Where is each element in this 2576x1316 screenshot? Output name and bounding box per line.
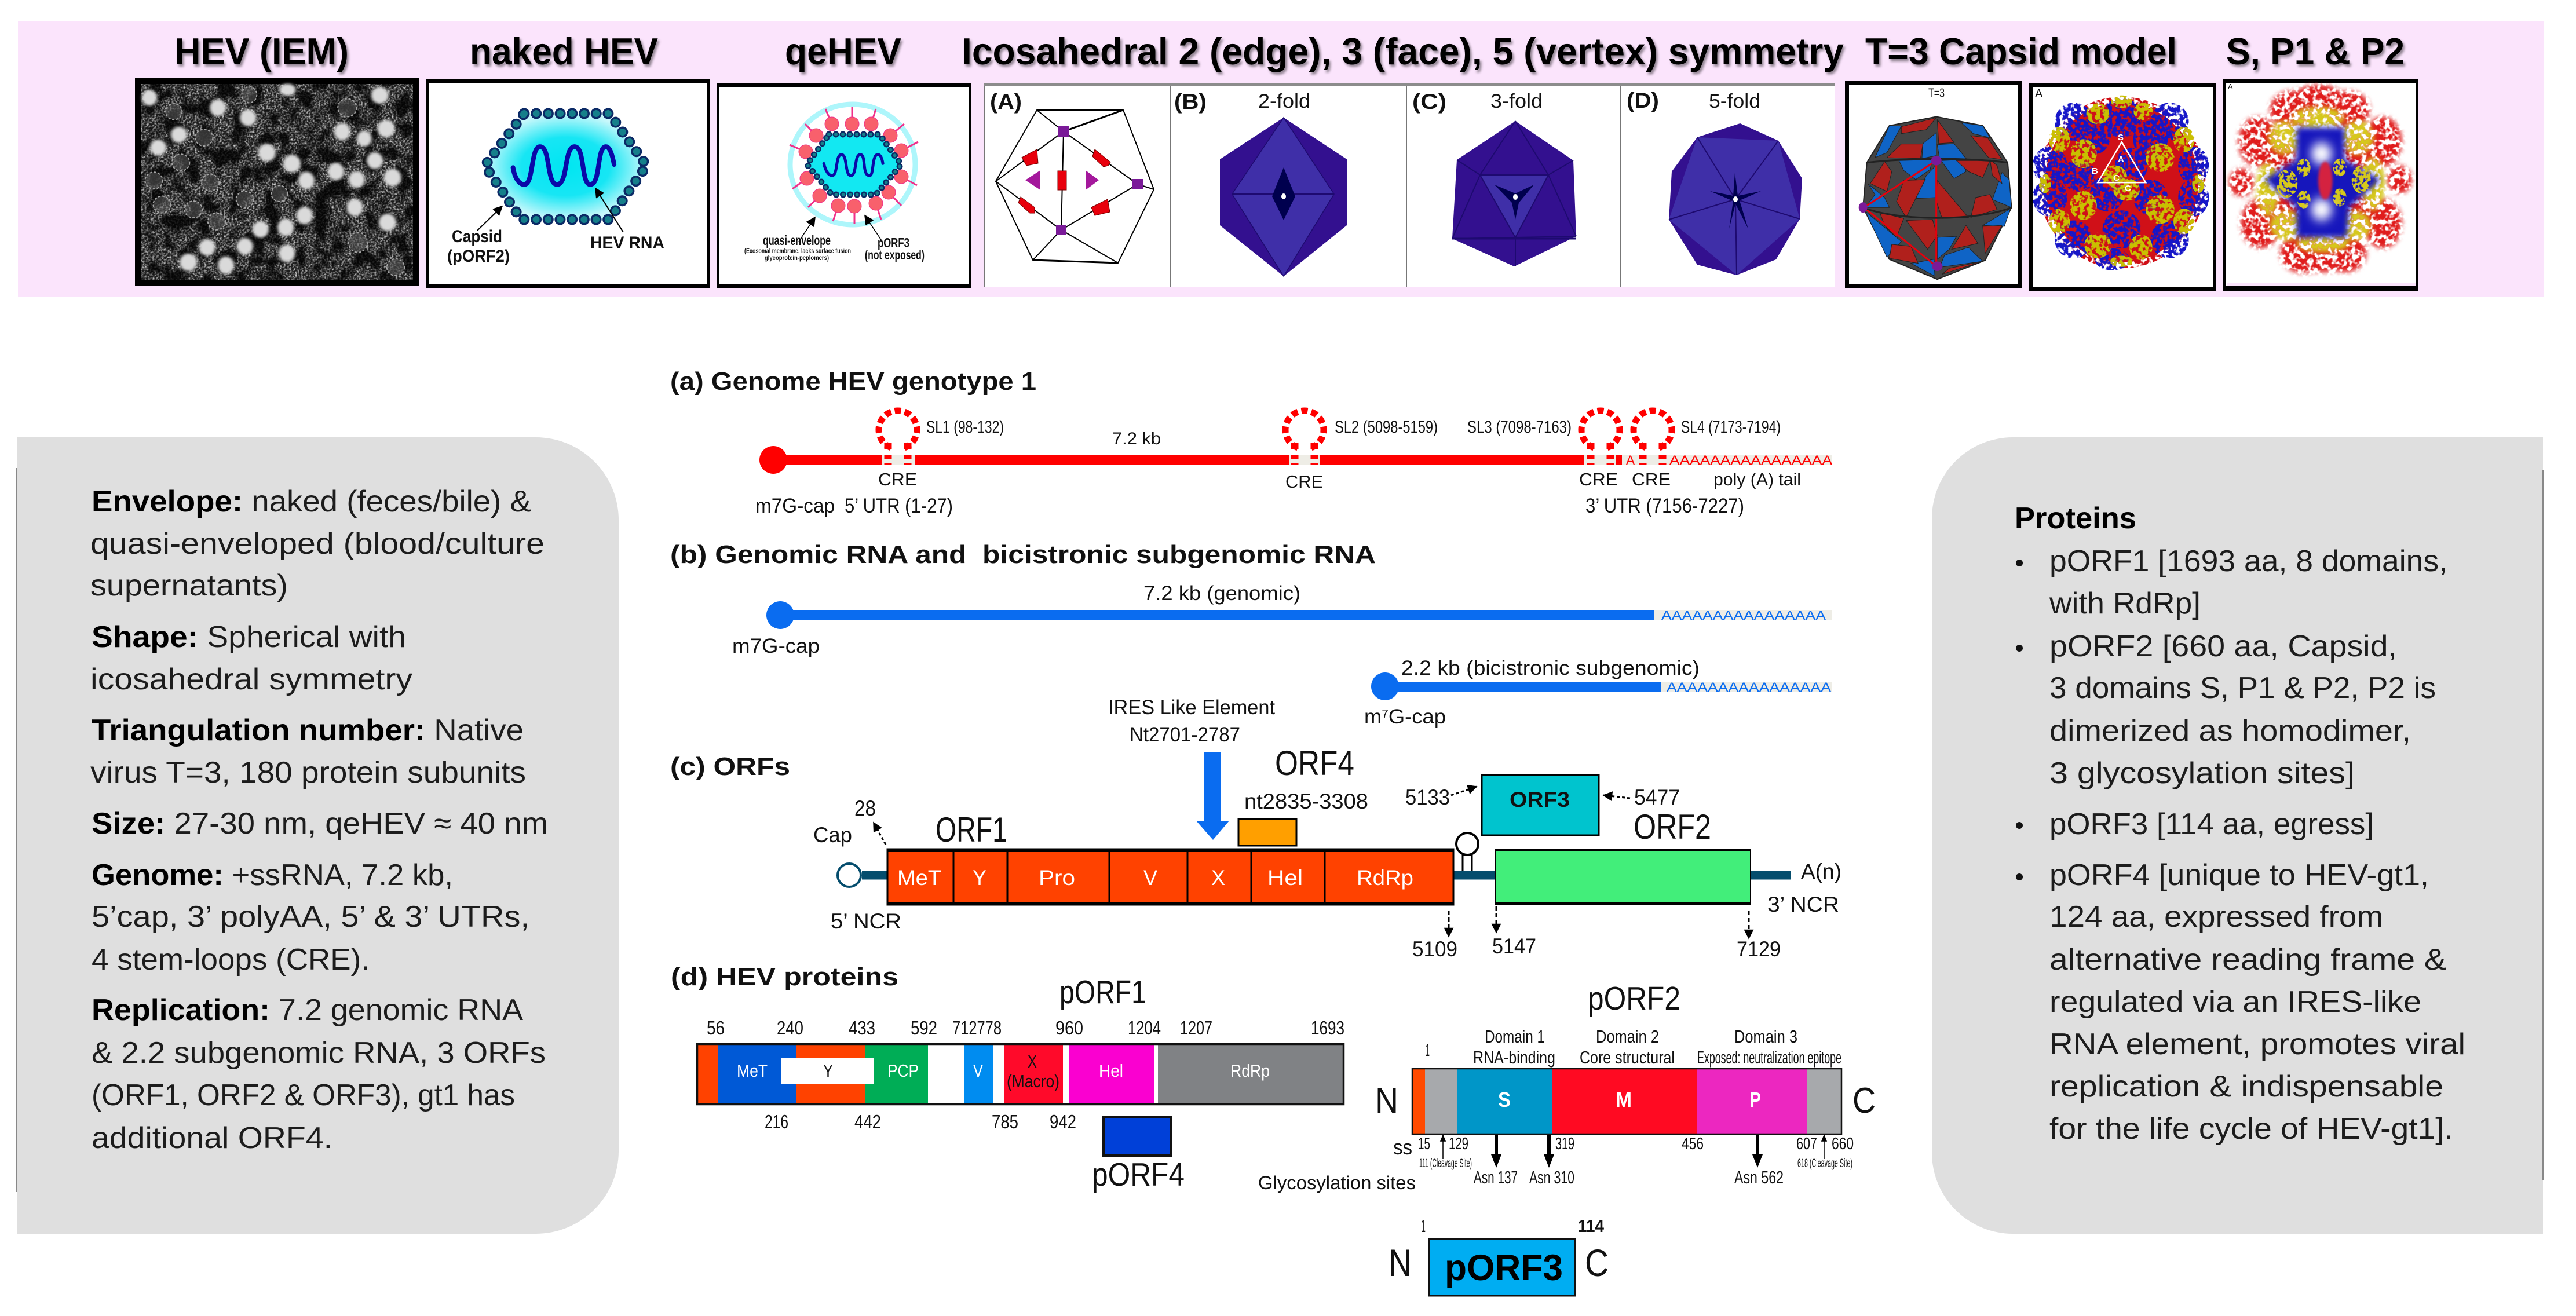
pORF2 domain labels: 1 — [1426, 1040, 1430, 1060]
yellow P1 domain — [2256, 107, 2385, 253]
label: quasi-envelope: quasi-envelope — [763, 233, 831, 248]
label 114 of pORF3: 114 — [1578, 1216, 1605, 1236]
text: replication: replication & indispensable — [2049, 1070, 2443, 1103]
label 5133: 5133 — [1405, 785, 1450, 809]
cleavage arrow 618 — [1822, 1135, 1826, 1159]
label IRES like element: IRES Like Element — [1108, 696, 1275, 719]
pORF2 position numbers: 15 — [1418, 1135, 1430, 1153]
title: icosahedral symmetry: Icosahedral 2 (edge), 3 (face), 5 (vertex) symmetry — [962, 30, 1844, 72]
pORF1 domain bar: PCP — [887, 1061, 919, 1081]
label 5' UTR: 5’ UTR (1-27) — [845, 495, 953, 517]
label 3' NCR: 3’ NCR — [1767, 893, 1839, 916]
envelope ring — [790, 104, 915, 225]
pORF1 bottom numbers: 785 — [992, 1111, 1018, 1132]
pORF1 domain bar — [696, 1043, 1344, 1105]
particles: bright — [142, 84, 401, 274]
label ss: ss — [1393, 1135, 1412, 1159]
glycosylation labels: Asn 137 — [1474, 1167, 1518, 1187]
pORF2 position numbers: 319 — [1555, 1135, 1574, 1153]
red genome line — [759, 446, 1832, 474]
label Cap: Cap — [813, 823, 852, 847]
subgenomic RNA bar: AAAAAAAAAAAAAAAA — [1667, 680, 1831, 694]
text: stem loops: 4 stem-loops (CRE). — [92, 943, 370, 977]
label ORF2: ORF2 — [1634, 807, 1711, 846]
coloured capsid sphere — [2033, 96, 2209, 270]
label 3' UTR: 3’ UTR (7156-7227) — [1585, 495, 1744, 517]
arrow: IRES — [1196, 752, 1229, 840]
poly A letter: A — [1626, 453, 1635, 467]
pORF1 domain bar: X — [1028, 1051, 1037, 1072]
text: cap and UTRs: 5’cap, 3’ polyAA, 5’ & 3’ UTRs, — [92, 900, 529, 934]
arrow: capsid — [477, 206, 502, 231]
text: ORF4: additional ORF4. — [92, 1121, 332, 1155]
bullets — [2016, 560, 2023, 880]
cleavage arrow 111 — [1441, 1135, 1445, 1159]
domain structure — [2229, 85, 2412, 273]
pORF2 domain labels: Domain 2 — [1596, 1026, 1659, 1047]
pORF4 box — [1104, 1117, 1171, 1156]
arrow: pORF3 — [865, 215, 882, 242]
pORF2 domain labels: Exposed: neutralization epitope — [1697, 1047, 1841, 1068]
panel A: wireframe — [990, 90, 1154, 263]
pORF1 bottom numbers: 942 — [1050, 1111, 1076, 1132]
label pORF1: pORF1 — [1059, 974, 1146, 1011]
panel: icosahedral symmetry — [984, 83, 1835, 287]
panel: naked HEV diagram — [426, 79, 710, 288]
label: A: A — [2228, 82, 2233, 91]
pORF2 domain labels: Domain 1 — [1485, 1026, 1545, 1047]
pORF1 bottom numbers: 442 — [854, 1111, 881, 1132]
section d: HEV proteins: 111 (Cleavage Site) — [1419, 1157, 1472, 1170]
panel: T=3 capsid model — [1845, 81, 2022, 288]
label m7G cap: m7G-cap — [755, 495, 835, 517]
text: envelope: Envelope: naked (feces/bile) & — [92, 485, 531, 518]
spikes — [790, 107, 918, 224]
pORF2 position numbers: 129 — [1449, 1135, 1468, 1153]
text: life cycle: for the life cycle of HEV-gt1]. — [2049, 1112, 2453, 1146]
ORF1 bar with domains: RdRp — [1357, 866, 1413, 890]
label N of pORF3: N — [1389, 1241, 1412, 1284]
label nt2835-3308: nt2835-3308 — [1244, 789, 1368, 813]
heading a: (a) Genome HEV genotype 1 — [670, 367, 1036, 396]
title: S, P1 & P2: S, P1 & P2 — [2226, 30, 2405, 72]
ORF1 bar with domains: MeT — [897, 866, 941, 890]
pORF2 domain bar: M — [1616, 1088, 1632, 1112]
label: HEV RNA: HEV RNA — [590, 233, 664, 253]
subgenomic RNA bar — [1371, 672, 1832, 700]
text: pORF3: pORF3 [114 aa, egress] — [2049, 807, 2374, 841]
panel: capsid atomic model — [2029, 83, 2216, 291]
domain letters on capsid: C — [2113, 173, 2120, 183]
capsid hexagon with beads — [485, 114, 646, 220]
pORF1 domain bar: Hel — [1099, 1061, 1123, 1081]
text: T=3: virus T=3, 180 protein subunits — [90, 756, 526, 789]
label SL4: SL4 (7173-7194) — [1681, 418, 1781, 437]
domain letters on capsid: S — [2118, 133, 2124, 142]
label N of pORF2: N — [1375, 1081, 1398, 1121]
domain letters on capsid — [2092, 133, 2131, 193]
pORF3 box — [1429, 1239, 1575, 1296]
text: RNA element: RNA element, promotes viral — [2049, 1028, 2465, 1061]
particles: ring shaped — [145, 87, 404, 276]
label: exosomal membrane: (Exosomal membrane, lacks surface fusion — [744, 247, 851, 255]
text: dimerized: dimerized as homodimer, — [2049, 714, 2411, 748]
label CRE 3: CRE — [1579, 469, 1618, 489]
blue S domain — [2264, 127, 2380, 237]
label C of pORF2: C — [1852, 1081, 1876, 1121]
ORF3 box: ORF3 — [1510, 788, 1570, 811]
glycosylation labels: Asn 310 — [1529, 1167, 1574, 1187]
panel: virus properties — [17, 437, 619, 1234]
text: pORF1: pORF1 [1693 aa, 8 domains, — [2049, 544, 2447, 578]
pORF2 position numbers: 607 — [1796, 1135, 1817, 1153]
pORF2 position numbers: 456 — [1682, 1135, 1704, 1153]
panel D: 5-fold: 5-fold — [1709, 90, 1760, 112]
section d: HEV proteins — [671, 963, 1876, 1296]
section d: HEV proteins: 1 — [1421, 1216, 1426, 1236]
label poly A tail: poly (A) tail — [1713, 469, 1801, 489]
section c: open reading frames — [670, 696, 1841, 961]
stem loop 4 — [1634, 411, 1672, 465]
text: IRES: regulated via an IRES-like — [2049, 985, 2421, 1019]
panel D: 5-fold: (D) — [1627, 89, 1659, 112]
pORF1 domain bar: V — [973, 1061, 983, 1081]
T=3 polyhedron — [1859, 116, 2012, 279]
arrow cap — [874, 822, 886, 845]
label Nt2701-2787: Nt2701-2787 — [1130, 723, 1240, 746]
arrow 5109 — [1448, 911, 1449, 937]
label ORF4: ORF4 — [1275, 744, 1354, 783]
banner background — [18, 21, 2544, 297]
pORF2 domain labels: Domain 3 — [1734, 1026, 1797, 1047]
arrow: envelope — [799, 217, 815, 242]
ORF2 bar — [1495, 849, 1751, 905]
pORF1 bottom numbers: 216 — [765, 1111, 788, 1132]
text: replication: Replication: 7.2 genomic RNA — [92, 993, 523, 1027]
ORF1 bar with domains — [887, 849, 1453, 905]
ORF1 bar with domains: Pro — [1039, 866, 1075, 890]
domain letters on capsid: A — [2118, 155, 2124, 164]
ORF1 bar with domains: X — [1211, 866, 1225, 890]
pORF2 domain labels: RNA-binding — [1473, 1047, 1555, 1068]
glycosylation labels: Asn 562 — [1734, 1167, 1784, 1187]
genomic RNA bar — [766, 601, 1832, 629]
text: pORF2: pORF2 [660 aa, Capsid, — [2049, 630, 2397, 663]
text: alternative frame: alternative reading frame & — [2049, 943, 2446, 977]
stem loop 2 — [1285, 411, 1324, 465]
pORF1 top numbers: 433 — [849, 1017, 875, 1039]
pORF1 domain bar: (Macro) — [1007, 1071, 1059, 1091]
panel C: 3-fold — [1412, 90, 1576, 266]
stem loop between ORFs — [1456, 833, 1478, 871]
label: T=3: T=3 — [1928, 86, 1945, 100]
label 7129: 7129 — [1737, 937, 1781, 961]
glycosylation arrows — [1491, 1135, 1763, 1168]
banner titles — [174, 30, 2405, 72]
pORF1 top numbers: 56 — [707, 1017, 725, 1039]
pORF2 position numbers — [1418, 1135, 1854, 1153]
label: glycoprotein: glycoprotein-peplomers) — [765, 254, 829, 262]
label m7G-cap subgenomic: G-cap — [1389, 705, 1446, 728]
label glycosylation sites: Glycosylation sites — [1258, 1172, 1416, 1193]
pORF1 domain bar: RdRp — [1230, 1061, 1270, 1081]
text: heading proteins: Proteins — [2015, 502, 2136, 535]
arrow 7129 — [1748, 911, 1749, 938]
panel C: 3-fold: 3-fold — [1490, 90, 1543, 112]
label m7G-cap: m7G-cap — [732, 635, 820, 657]
panel: quasi-enveloped HEV diagram — [717, 83, 971, 288]
RNA wave — [824, 155, 883, 176]
label 5147: 5147 — [1492, 934, 1536, 958]
text: supernatants: supernatants) — [90, 569, 288, 602]
pORF2 domain labels — [1426, 1026, 1841, 1068]
label: pORF3: pORF3 — [878, 235, 909, 250]
text: icosahedral symmetry: icosahedral symmetry — [90, 663, 412, 696]
text: ORFs: (ORF1, ORF2 & ORF3), gt1 has — [92, 1079, 515, 1112]
panel D: 5-fold — [1627, 89, 1802, 275]
panel A: wireframe: (A) — [990, 90, 1022, 114]
glycosylation labels — [1474, 1167, 1784, 1187]
pORF2 domain bar: S — [1498, 1088, 1511, 1112]
text: 124 aa: 124 aa, expressed from — [2049, 900, 2383, 934]
label 5109: 5109 — [1412, 937, 1457, 961]
domain letters on capsid: C — [2125, 184, 2131, 193]
label genomic: 7.2 kb (genomic) — [1143, 582, 1300, 605]
panel: S, P1 and P2 domains — [2223, 79, 2418, 291]
title: qeHEV: qeHEV — [785, 30, 901, 72]
heading b: (b) Genomic RNA and bicistronic subgenomic RNA — [670, 540, 1376, 569]
text: with RdRp: with RdRp] — [2049, 587, 2201, 620]
pORF2 domain bar — [1412, 1069, 1841, 1134]
pORF1 bottom numbers — [765, 1111, 1076, 1132]
label 7.2 kb: 7.2 kb — [1112, 429, 1161, 448]
panel: electron micrograph of HEV particles — [135, 78, 419, 286]
label m7G-cap subgenomic: 7 — [1382, 708, 1389, 721]
stem loop 3 — [1581, 411, 1620, 465]
text: glycosylation: 3 glycosylation sites] — [2049, 756, 2355, 790]
title: HEV (IEM): HEV (IEM) — [174, 30, 349, 72]
panel: proteins — [1932, 437, 2543, 1234]
label CRE 2: CRE — [1285, 471, 1323, 492]
pORF1 top numbers: 240 — [777, 1017, 803, 1039]
label: A: A — [2035, 87, 2043, 100]
label 5' NCR: 5’ NCR — [831, 909, 901, 933]
label 28: 28 — [854, 796, 876, 820]
arrow 5477 — [1603, 795, 1630, 798]
text: subgenomic: & 2.2 subgenomic RNA, 3 ORFs — [92, 1036, 546, 1070]
5' cap circle — [838, 864, 861, 887]
label SL1: SL1 (98-132) — [926, 418, 1004, 437]
pORF2 domain bar: P — [1750, 1088, 1761, 1112]
section a: genome HEV genotype 1 — [670, 367, 1832, 517]
pale axes — [2311, 142, 2332, 221]
label: pORF2: (pORF2) — [447, 247, 510, 266]
label SL2: SL2 (5098-5159) — [1335, 418, 1438, 437]
label 5477: 5477 — [1634, 785, 1680, 809]
pORF1 top numbers: 1207 — [1180, 1017, 1212, 1039]
pORF1 domain bar: MeT — [737, 1061, 768, 1081]
arrow 5133 — [1451, 787, 1477, 795]
title: naked HEV: naked HEV — [470, 30, 658, 72]
domain letters on capsid: B — [2092, 166, 2098, 176]
label subgenomic: 2.2 kb (bicistronic subgenomic) — [1401, 657, 1700, 679]
central red strand — [2318, 162, 2333, 199]
label 618 cleavage site: 618 (Cleavage Site) — [1797, 1157, 1852, 1170]
pORF1 top numbers: 1693 — [1311, 1017, 1344, 1039]
text: quasi-enveloped: quasi-enveloped (blood/culture — [90, 527, 545, 561]
section b: genomic and subgenomic RNA — [670, 540, 1832, 728]
HEV RNA wave — [513, 147, 614, 185]
text: 3 domains: 3 domains S, P1 & P2, P2 is — [2049, 671, 2436, 705]
label ORF1: ORF1 — [936, 810, 1007, 849]
text: size: Size: 27-30 nm, qeHEV ≈ 40 nm — [92, 807, 548, 840]
text: genome: Genome: +ssRNA, 7.2 kb, — [92, 858, 453, 892]
pORF3 box: pORF3 — [1445, 1248, 1563, 1288]
label CRE 4: CRE — [1632, 469, 1671, 489]
pORF2 domain labels: Core structural — [1580, 1047, 1675, 1068]
label pORF4: pORF4 — [1092, 1156, 1185, 1193]
label SL3: SL3 (7098-7163) — [1467, 418, 1572, 437]
text: triangulation number: Triangulation number: Native — [92, 714, 524, 747]
panel B: 2-fold: 2-fold — [1258, 90, 1310, 112]
arrow 5147 — [1496, 906, 1497, 933]
capsid hexagon — [807, 134, 901, 195]
poly A tail: AAAAAAAAAAAAAAAA — [1669, 453, 1832, 467]
label A(n): A(n) — [1801, 860, 1841, 883]
pORF1 top numbers: 592 — [911, 1017, 937, 1039]
arrow: HEV RNA — [595, 188, 623, 232]
ORF4 box — [1238, 819, 1296, 846]
stem loop 1 — [879, 411, 917, 465]
heading d: (d) HEV proteins — [671, 963, 898, 991]
pORF1 top numbers — [707, 1017, 1344, 1039]
panel B: 2-fold — [1174, 90, 1347, 276]
panel C: 3-fold: (C) — [1412, 90, 1446, 114]
label m7G-cap subgenomic: m — [1364, 705, 1381, 728]
label pORF2: pORF2 — [1588, 980, 1680, 1017]
yellow flecks — [2277, 159, 2371, 209]
text: pORF4: pORF4 [unique to HEV-gt1, — [2049, 858, 2429, 892]
pORF2 position numbers: 660 — [1832, 1135, 1854, 1153]
title: T=3 capsid model: T=3 Capsid model — [1865, 30, 2177, 72]
genomic RNA bar: AAAAAAAAAAAAAAAA — [1661, 608, 1826, 623]
pORF1 domain bar: Y — [823, 1061, 833, 1081]
label CRE 1: CRE — [878, 469, 917, 489]
ORF1 bar with domains: Hel — [1267, 866, 1303, 890]
ORF1 bar with domains: Y — [973, 866, 986, 890]
ORF3 box — [1482, 775, 1599, 835]
pORF1 top numbers: 960 — [1055, 1017, 1083, 1039]
label: not exposed: (not exposed) — [865, 247, 925, 262]
label C of pORF3: C — [1585, 1241, 1609, 1284]
text: shape: Shape: Spherical with — [92, 620, 406, 654]
pORF1 top numbers: 1204 — [1128, 1017, 1161, 1039]
heading c: (c) ORFs — [670, 752, 790, 781]
pORF1 top numbers: 712778 — [952, 1017, 1002, 1039]
red P2 domain lobes — [2229, 85, 2412, 273]
non-coding region lines — [862, 871, 1791, 879]
ORF1 bar with domains: V — [1143, 866, 1157, 890]
panel B: 2-fold: (B) — [1174, 90, 1207, 114]
label: capsid: Capsid — [452, 227, 502, 246]
